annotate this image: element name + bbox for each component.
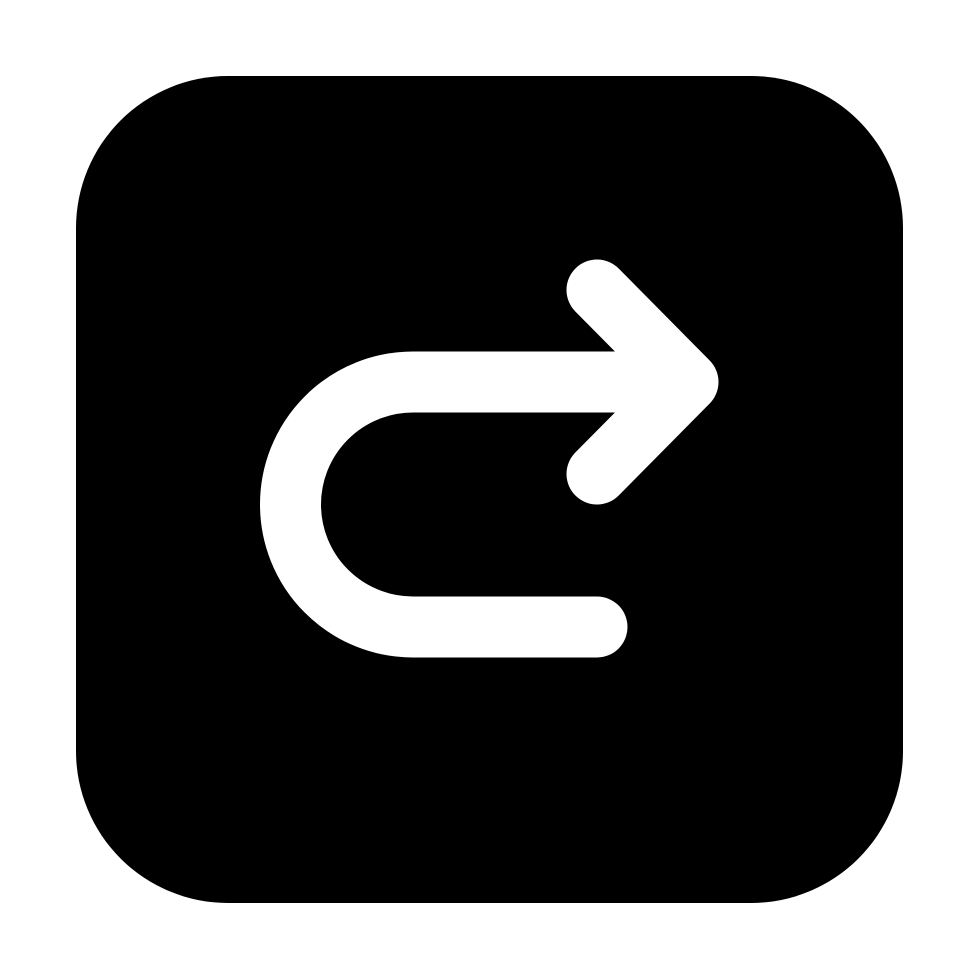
- rounded square background: [76, 76, 903, 903]
- U-turn arrow: [290, 290, 688, 627]
- arrow head: [597, 290, 688, 474]
- arrow shaft: [290, 382, 687, 627]
